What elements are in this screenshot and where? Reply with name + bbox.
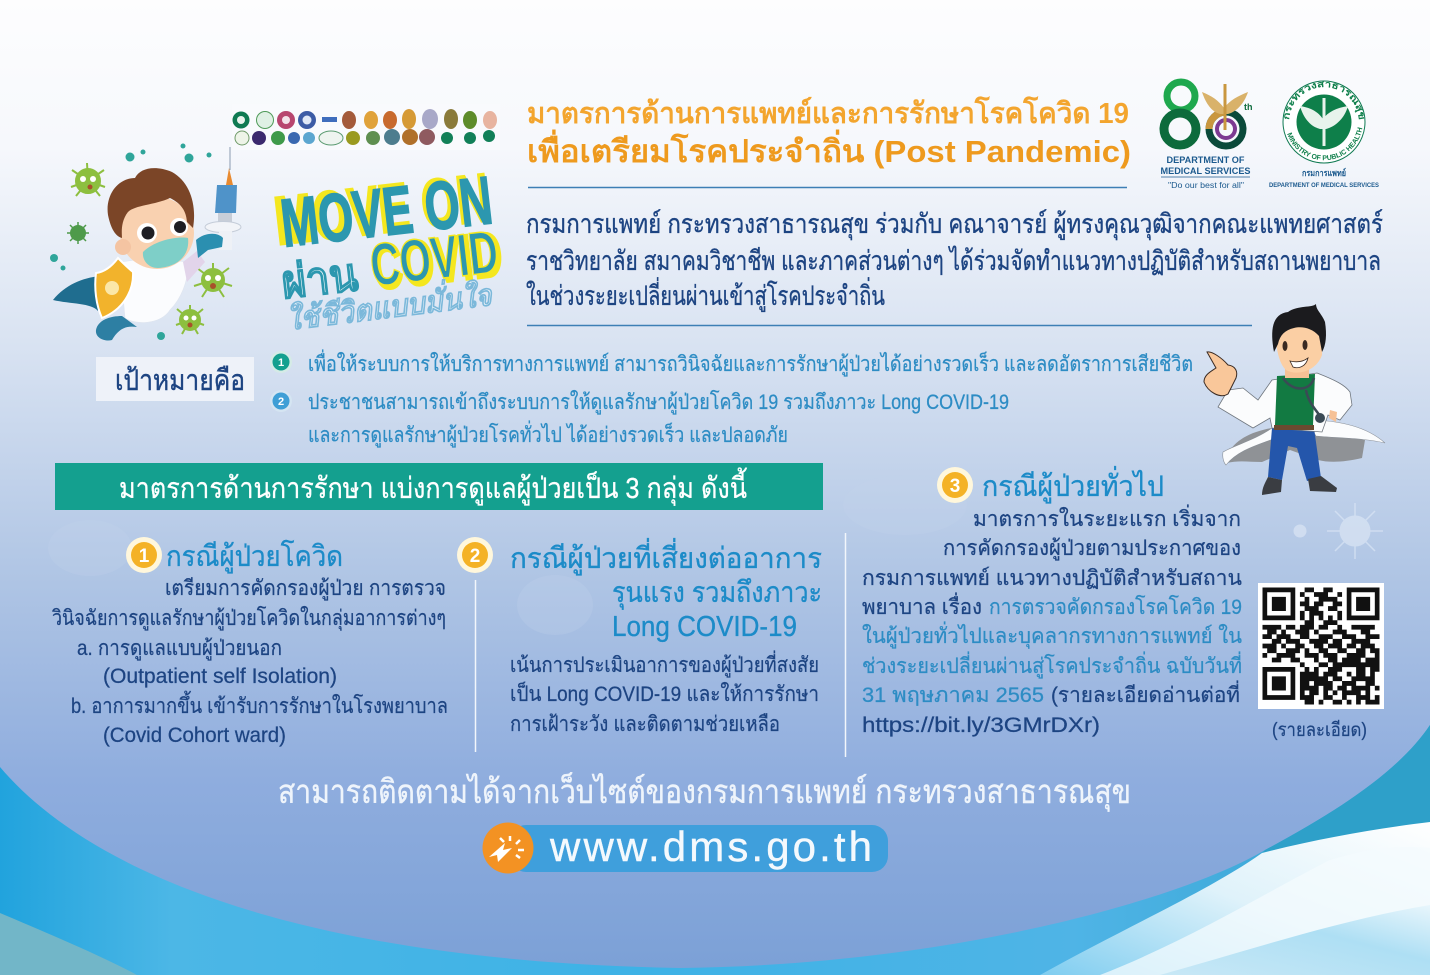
illustration: doctor superhero	[1204, 304, 1385, 495]
body: case 2	[510, 650, 819, 736]
body: case 3: การคัดกรองผู้ป่วยตามประกาศของ	[943, 537, 1241, 561]
section banner: มาตรการด้านการรักษา แบ่งการดูแลผู้ป่วยเป็น 3 กลุ่ม ดังนี้	[119, 467, 747, 506]
boots	[96, 316, 137, 341]
body: case 1: (Covid Cohort ward)	[103, 724, 286, 747]
partner logos strip	[232, 104, 500, 150]
website link pill: www.dms.go.th	[549, 823, 872, 870]
body: case 3: (รายละเอียดอ่านต่อที่	[1051, 680, 1240, 707]
coat tails	[1223, 420, 1385, 465]
logo: Department of Medical Services 80th: "Do our best for all"	[1168, 181, 1244, 190]
logo: Department of Medical Services 80th: MEDICAL SERVICES	[1160, 166, 1251, 176]
coat sleeve and body	[1218, 373, 1352, 432]
logo: Ministry of Public Health: DEPARTMENT OF MEDICAL SERVICES	[1269, 182, 1380, 189]
neck and head	[1285, 366, 1309, 378]
badge 2	[457, 537, 493, 573]
body: case 2: เน้นการประเมินอาการของผู้ป่วยที่สงสัย	[510, 650, 819, 678]
heading: case 2	[510, 538, 822, 643]
goal 1: เพื่อให้ระบบการให้บริการทางการแพทย์ สามารถวินิจฉัยและการรักษาผู้ป่วยได้อย่างรวดเร็ว และลดอัตราการเสียชีวิต	[308, 349, 1193, 377]
yellow shadow text: MOVE ON	[271, 160, 494, 260]
illustration: child superhero with syringe	[50, 144, 241, 341]
badge 1: 1	[139, 546, 150, 567]
body: case 3: ช่วงระยะเปลี่ยนผ่านสู่โรคประจำถิ่น ฉบับวันที่	[862, 651, 1242, 679]
medical mask	[143, 238, 188, 268]
badge 2: 2	[470, 546, 480, 567]
body: case 1	[52, 577, 448, 747]
logo: Ministry of Public Health	[1269, 80, 1380, 189]
badge 1	[126, 537, 162, 573]
yellow shadow text	[271, 159, 506, 314]
campaign slogan: ใช้ชีวิตแบบมั่นใจ	[284, 273, 496, 337]
pointing hand	[1204, 352, 1237, 396]
hair	[1272, 304, 1326, 352]
shoes	[1262, 477, 1282, 495]
title: มาตรการด้านการแพทย์และการรักษาโรคโควิด 19	[527, 95, 1129, 130]
panel: case 1	[52, 537, 448, 747]
body: case 1: วินิจฉัยการดูแลรักษาผู้ป่วยโควิดในกลุ่มอาการต่างๆ	[52, 606, 446, 631]
faint cloud shapes	[48, 475, 967, 635]
logo: Department of Medical Services 80th	[1160, 82, 1252, 190]
body: case 2: การเฝ้าระวัง และติดตามช่วยเหลือ	[510, 713, 780, 736]
virus particles	[50, 144, 232, 340]
campaign logo: MOVE ON: MOVE ON	[277, 162, 496, 262]
cape: grey lining	[1227, 428, 1365, 463]
goal 1	[270, 349, 1193, 377]
title	[527, 95, 1131, 169]
goal 2: ประชาชนสามารถเข้าถึงระบบการให้ดูแลรักษาผู้ป่วยโควิด 19 รวมถึงภาวะ Long COVID-19	[308, 390, 1009, 415]
goal 2: 2	[278, 396, 284, 408]
logo: Ministry of Public Health: MINISTRY OF PUBLIC HEALTH	[1287, 127, 1362, 160]
body: case 1: เตรียมการคัดกรองผู้ป่วย การตรวจ	[165, 577, 446, 601]
panel: case 2	[457, 537, 822, 736]
hand on hip	[1329, 410, 1337, 422]
badge 3	[937, 467, 973, 503]
glove	[196, 234, 223, 258]
body: case 1: (Outpatient self Isolation)	[103, 665, 337, 688]
body: case 3: ในผู้ป่วยทั่วไปและบุคลากรทางการแพทย์ ใน	[862, 621, 1242, 649]
heading: case 1: กรณีผู้ป่วยโควิด	[166, 539, 343, 574]
body: case 2: เป็น Long COVID-19 และให้การรักษา	[510, 680, 819, 706]
body	[120, 258, 188, 323]
icon: cursor click	[482, 822, 534, 874]
panel: case 3	[862, 466, 1242, 737]
yellow shadow text: COVID	[369, 218, 506, 304]
body: case 3: 31 พฤษภาคม 2565	[862, 684, 1044, 707]
goal 2	[270, 390, 1009, 448]
green shirt	[1275, 374, 1315, 425]
goals label: เป้าหมายคือ	[115, 365, 245, 397]
title: เพื่อเตรียมโรคประจำถิ่น (Post Pandemic)	[527, 129, 1131, 169]
heading: case 2: รุนแรง รวมถึงภาวะ	[612, 577, 822, 610]
heading: case 3: กรณีผู้ป่วยทั่วไป	[982, 466, 1164, 504]
section banner	[55, 463, 823, 510]
body: case 3: มาตรการในระยะแรก เริ่มจาก	[973, 504, 1241, 531]
stethoscope	[1283, 378, 1320, 416]
heading: case 2: Long COVID-19	[612, 611, 797, 643]
intro paragraph: ในช่วงระยะเปลี่ยนผ่านเข้าสู่โรคประจำถิ่น	[526, 277, 885, 312]
syringe	[205, 147, 241, 250]
QR caption: (รายละเอียด)	[1272, 719, 1367, 741]
footer line: สามารถติดตามได้จากเว็บไซต์ของกรมการแพทย์ กระทรวงสาธารณสุข	[278, 772, 1131, 812]
head	[120, 197, 194, 269]
badge 3: 3	[950, 476, 960, 497]
bottom wave: cyan	[0, 725, 1430, 975]
jeans	[1268, 428, 1321, 481]
logo: Ministry of Public Health: กรมการแพทย์	[1302, 167, 1346, 178]
campaign logo: MOVE ON: ผ่าน	[279, 248, 361, 308]
heading: case 2: กรณีผู้ป่วยที่เสี่ยงต่ออาการ	[510, 538, 822, 576]
body: case 3: การตรวจคัดกรองโรคโควิด 19	[989, 595, 1242, 619]
intro paragraph	[526, 208, 1383, 312]
campaign logo: MOVE ON: COVID	[367, 218, 501, 299]
bottom wave: white	[1040, 822, 1430, 975]
body: case 3: กรมการแพทย์ แนวทางปฏิบัติสำหรับสถาน	[862, 566, 1242, 590]
body: case 3	[862, 504, 1242, 737]
body: case 1: b. อาการมากขึ้น เข้ารับการรักษาในโรงพยาบาล	[71, 691, 448, 718]
logo: Department of Medical Services 80th: DEPARTMENT OF	[1166, 155, 1245, 165]
shield	[95, 258, 133, 318]
cape	[53, 276, 100, 311]
body: case 3: https://bit.ly/3GMrDXr)	[862, 714, 1100, 737]
face	[1282, 341, 1288, 351]
goal 1: 1	[278, 357, 284, 369]
goal 2: และการดูแลรักษาผู้ป่วยโรคทั่วไป ได้อย่างรวดเร็ว และปลอดภัย	[308, 420, 788, 448]
body: case 1: a. การดูแลแบบผู้ป่วยนอก	[77, 637, 282, 661]
body: case 3: พยาบาล เรื่อง	[862, 592, 982, 619]
logo: Ministry of Public Health: กระทรวงสาธารณสุข	[1284, 82, 1364, 120]
goals label	[96, 357, 254, 401]
campaign logo: MOVE ON	[271, 159, 506, 337]
logo: Department of Medical Services 80th: th	[1244, 102, 1252, 112]
QR code	[1258, 583, 1384, 709]
faint virus decoration	[1294, 503, 1383, 559]
